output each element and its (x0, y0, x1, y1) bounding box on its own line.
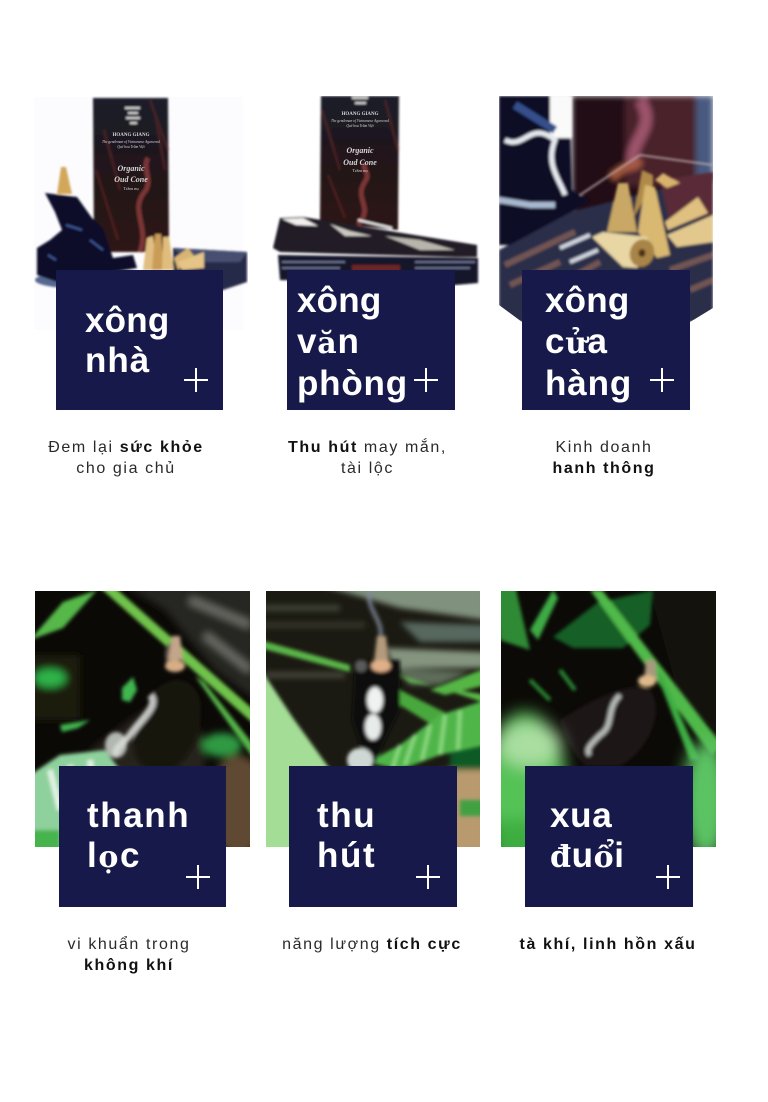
heading (545, 281, 632, 403)
heading: đuổi (550, 836, 625, 875)
caption (68, 936, 190, 974)
photo: burner in front of rocks and fern (266, 591, 480, 847)
box label text: HOANG GIANG (112, 133, 150, 138)
heading (87, 796, 190, 875)
box label text: Quê hoa Trầm Việt (346, 124, 375, 128)
heading (297, 281, 408, 403)
heading: hút (317, 836, 376, 875)
box label text: Trầm nụ (123, 186, 139, 191)
heading: xông (545, 281, 629, 320)
caption (48, 439, 204, 477)
caption: vi khuẩn trong (68, 936, 190, 953)
heading: nhà (85, 341, 150, 380)
box label text: The gentleman of Vietnamese Agarwood (102, 140, 160, 144)
box label text: HOANG GIANG (341, 112, 379, 117)
caption: Kinh doanh (556, 439, 652, 456)
title box (287, 270, 455, 410)
heading: hàng (545, 364, 632, 403)
title box (59, 766, 226, 907)
box label text: Oud Cone (114, 175, 148, 184)
box label text: Quê hoa Trầm Việt (117, 145, 146, 149)
box label text (102, 133, 160, 191)
heading: thu (317, 796, 376, 835)
box label text (331, 112, 389, 173)
caption (552, 439, 656, 477)
heading: lọc (87, 836, 141, 875)
heading: văn (297, 322, 360, 360)
heading: phòng (297, 364, 408, 403)
panel: xông văn phòng (272, 96, 480, 477)
panel: thu hút (266, 591, 480, 953)
heading: cửa (545, 322, 608, 360)
caption: năng lượng tích cực (282, 936, 462, 953)
caption: tà khí, linh hồn xấu (520, 936, 696, 953)
title box (56, 270, 223, 410)
title box (289, 766, 457, 907)
icon: plus (656, 865, 680, 889)
photo: burner with incense box on white (34, 96, 248, 292)
panel: xông nhà (34, 96, 248, 477)
heading (317, 796, 376, 875)
box label text: Oud Cone (343, 158, 377, 167)
caption: cho gia chủ (76, 460, 176, 477)
icon: plus (184, 368, 208, 392)
icon: plus (186, 865, 210, 889)
heading: xua (550, 796, 612, 835)
heading (85, 301, 169, 380)
caption: không khí (84, 957, 174, 974)
caption: tài lộc (341, 460, 394, 477)
heading: thanh (87, 796, 190, 835)
box label text: Organic (117, 164, 145, 173)
heading (550, 796, 625, 875)
caption: Đem lại sức khỏe (48, 439, 204, 456)
photo: open incense box (272, 96, 480, 286)
photo: burner with smoke among leaves (35, 591, 250, 847)
icon: plus (414, 368, 438, 392)
icon: plus (416, 865, 440, 889)
caption: hanh thông (552, 460, 656, 477)
heading: xông (297, 281, 381, 320)
caption (288, 438, 447, 477)
photo: close-up of incense cones (499, 96, 713, 322)
icon: plus (650, 368, 674, 392)
panel: xua đuổi (501, 591, 716, 953)
box label text: Organic (346, 146, 374, 155)
heading: xông (85, 301, 169, 340)
panel: thanh lọc (35, 591, 250, 974)
box label text: The gentleman of Vietnamese Agarwood (331, 119, 389, 123)
caption: Thu hút may mắn, (288, 439, 447, 456)
title box (525, 766, 693, 907)
photo: burner with blurred green foreground (501, 591, 716, 847)
box label text: Trầm nụ (352, 168, 368, 173)
panel: xông cửa hàng (499, 96, 713, 477)
title box (522, 270, 690, 410)
